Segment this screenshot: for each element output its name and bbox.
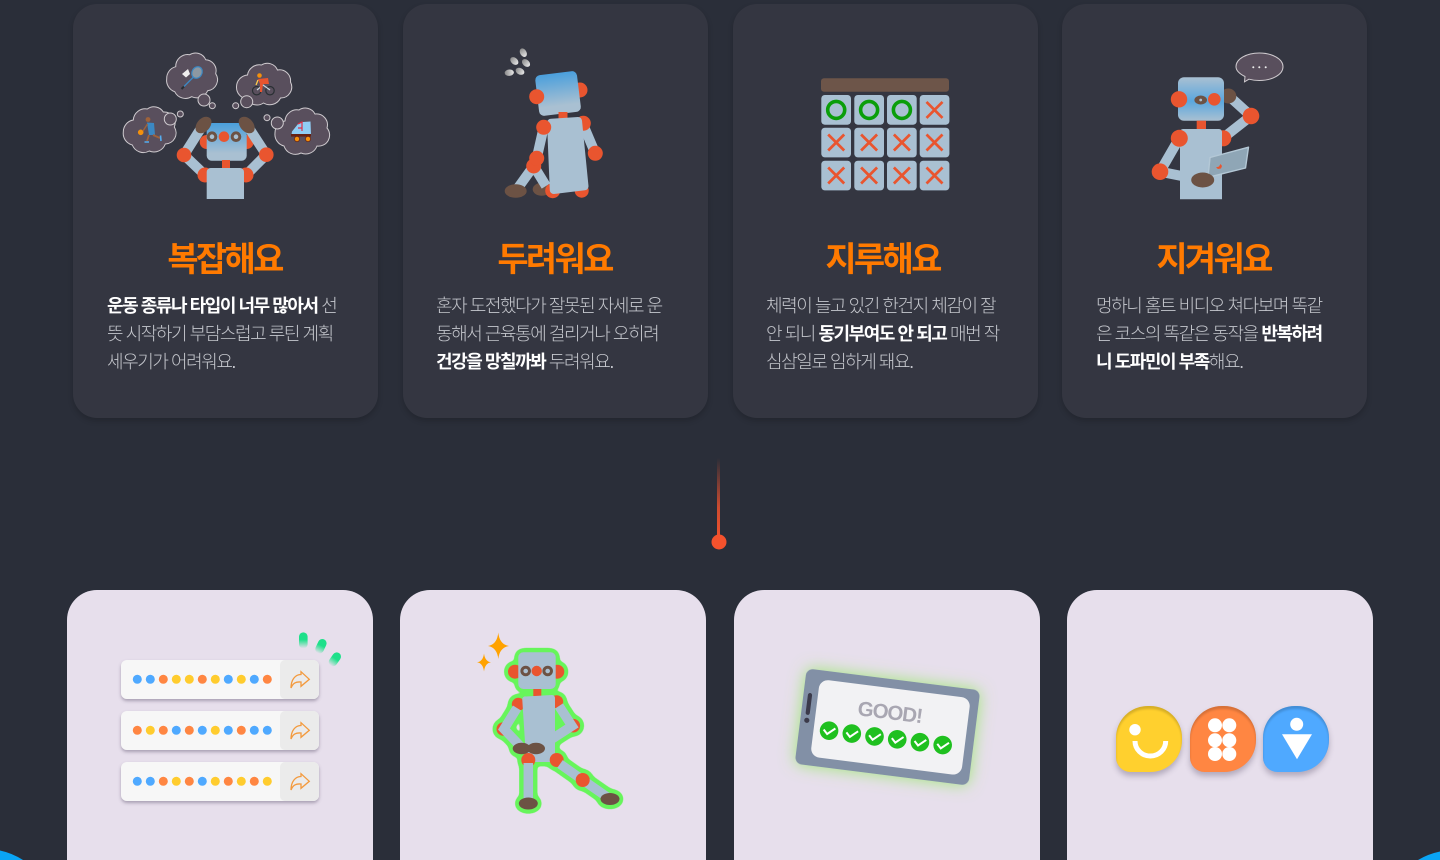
panel: bored xyxy=(733,4,1038,418)
label: GOOD: GOOD! xyxy=(856,697,923,728)
panel: tired of routine xyxy=(1062,4,1367,418)
laptop xyxy=(1191,147,1248,188)
panel: fun app icons xyxy=(1067,590,1373,860)
text block: 안 되니 동기부여도 안 되고 매번 작 xyxy=(766,324,999,344)
illustration: habit tracker board xyxy=(821,78,950,190)
text block xyxy=(436,296,662,372)
text block: 니 도파민이 부족해요. xyxy=(1096,352,1243,372)
illustration: robot thinking about many sports xyxy=(122,52,330,199)
row 1 xyxy=(121,660,319,699)
phone xyxy=(795,668,980,786)
connector line with dot xyxy=(712,460,726,550)
cross cells xyxy=(821,95,949,190)
icon: orange dots xyxy=(1190,706,1256,772)
circle cells xyxy=(821,95,917,125)
text block: 세우기가 어려워요. xyxy=(107,352,235,372)
text block: 멍하니 홈트 비디오 쳐다보며 똑같 xyxy=(1096,296,1322,316)
text block: 심삼일로 임하게 돼요. xyxy=(766,352,913,372)
heading: 두려워요 xyxy=(497,241,612,279)
row 2 xyxy=(121,711,319,750)
illustration: robot with green pose outline xyxy=(477,632,624,814)
sweat drops xyxy=(504,47,532,76)
sparkle drops xyxy=(299,632,343,668)
robot xyxy=(177,114,274,199)
thought cloud: cycling xyxy=(233,63,292,109)
text block: 은 코스의 똑같은 동작을 반복하려 xyxy=(1096,324,1322,344)
text block: 혼자 도전했다가 잘못된 자세로 운 xyxy=(436,296,662,316)
illustration: robot with laptop xyxy=(1152,52,1284,200)
robot xyxy=(496,652,620,810)
corner accent right xyxy=(1418,852,1440,860)
panel: feedback xyxy=(734,590,1040,860)
robot xyxy=(1152,77,1259,199)
panel: complicated xyxy=(73,4,378,418)
text block: 동해서 근육통에 걸리거나 오히려 xyxy=(436,324,658,344)
speech bubble xyxy=(1236,53,1283,82)
check marks xyxy=(819,720,953,755)
illustration: robot hurt and sitting xyxy=(504,48,603,198)
heading: 지루해요 xyxy=(825,241,940,279)
panel: posture correction xyxy=(400,590,706,860)
thought cloud: badminton xyxy=(167,53,218,109)
heading: 복잡해요 xyxy=(167,241,282,279)
icon: blue person xyxy=(1263,706,1329,772)
text block: 체력이 늘고 있긴 한건지 체감이 잘 xyxy=(766,296,995,316)
panel: routine recommendation list xyxy=(67,590,373,860)
heading: 지겨워요 xyxy=(1156,241,1271,279)
icon: yellow smile xyxy=(1116,706,1182,772)
board header xyxy=(821,78,949,92)
text block: 건강을 망칠까봐 두려워요. xyxy=(436,352,613,372)
corner accent left xyxy=(0,850,23,860)
text block: 운동 종류나 타입이 너무 많아서 선 xyxy=(107,296,336,316)
illustration: phone showing GOOD with checks xyxy=(785,658,990,796)
illustration: three routine rows with share buttons xyxy=(119,632,341,805)
thought cloud: roller skate xyxy=(264,108,330,154)
robot xyxy=(505,71,603,198)
panel: afraid xyxy=(403,4,708,418)
text block xyxy=(1096,296,1322,372)
text block xyxy=(766,296,1000,372)
text block xyxy=(107,296,336,372)
thought cloud: basketball xyxy=(123,107,183,153)
sparkles xyxy=(477,632,509,672)
row 3 xyxy=(121,762,319,801)
text block: 뜻 시작하기 부담스럽고 루틴 계획 xyxy=(107,324,333,344)
